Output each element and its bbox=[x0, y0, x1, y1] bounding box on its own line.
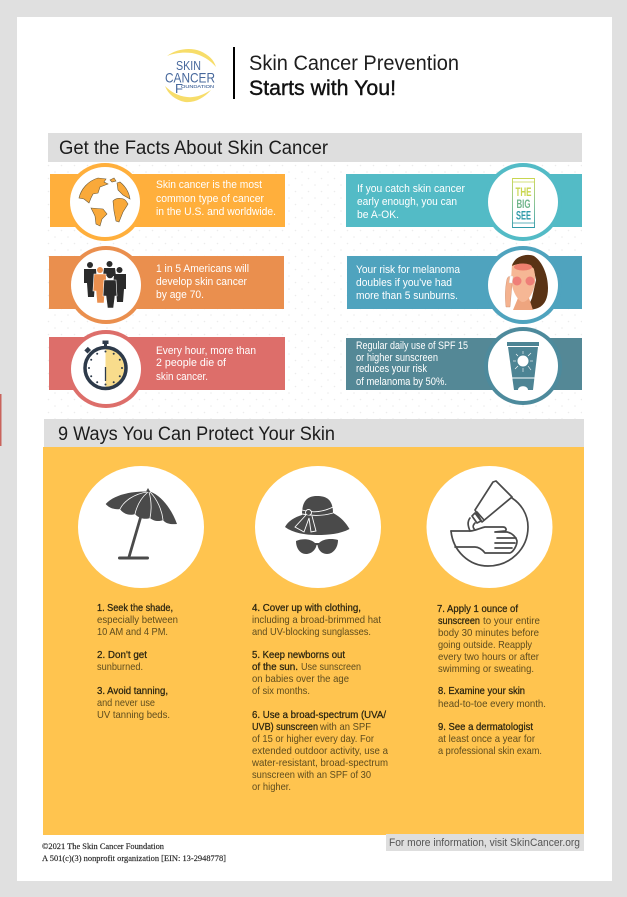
fact: sunburns bbox=[347, 246, 582, 324]
list column 3: head-to-toe every month. bbox=[438, 699, 546, 710]
fact text: doubles if you've had bbox=[356, 277, 452, 289]
header divider bar bbox=[233, 47, 235, 99]
list column 2: 6. Use a broad-spectrum (UVA/ bbox=[252, 710, 386, 721]
list column 2: extended outdoor activity, use a bbox=[252, 746, 388, 757]
title: Starts with You! bbox=[249, 76, 396, 100]
list column 2: water-resistant, broad-spectrum bbox=[251, 758, 388, 769]
list column 2: sunscreen with an SPF of 30 bbox=[252, 770, 371, 781]
icon: beach umbrella bbox=[78, 466, 204, 588]
list column 1: sunburned. bbox=[97, 662, 143, 673]
list column 2: of 15 or higher every day. For bbox=[252, 734, 375, 745]
logo: Skin Cancer Foundation: CANCER bbox=[165, 70, 215, 86]
list column 3 bbox=[437, 604, 546, 757]
fact text bbox=[156, 263, 249, 301]
list column 2: of the sun. bbox=[252, 662, 298, 673]
fact text: early enough, you can bbox=[357, 196, 457, 208]
fact: catch early bbox=[346, 163, 582, 241]
icon: sunburned face bbox=[505, 255, 548, 310]
fact text: or higher sunscreen bbox=[356, 352, 438, 364]
fact text: Skin cancer is the most bbox=[156, 179, 262, 191]
list column 2: on babies over the age bbox=[252, 674, 349, 685]
list column 3: every two hours or after bbox=[438, 652, 540, 663]
list column 1: 3. Avoid tanning, bbox=[97, 686, 168, 697]
fact text: develop skin cancer bbox=[156, 276, 247, 288]
title: Skin Cancer Prevention bbox=[249, 51, 459, 75]
fact text bbox=[156, 179, 276, 218]
list column 2: including a broad-brimmed hat bbox=[252, 615, 381, 626]
list column 3: going outside. Reapply bbox=[438, 640, 533, 651]
fact text: Regular daily use of SPF 15 bbox=[356, 340, 468, 352]
list column 1: UV tanning beds. bbox=[97, 710, 170, 721]
heading: Get the Facts bbox=[48, 133, 582, 162]
title bbox=[249, 51, 459, 100]
fact text bbox=[356, 264, 461, 302]
fact text bbox=[357, 183, 465, 221]
fact text: common type of cancer bbox=[156, 193, 264, 205]
icon: hat and sunglasses bbox=[255, 466, 381, 588]
list column 3: body 30 minutes before bbox=[438, 628, 539, 639]
list column 2: with an SPF bbox=[319, 722, 371, 733]
fact text: by age 70. bbox=[156, 289, 204, 301]
list column 1: and never use bbox=[97, 698, 155, 709]
list column 1: 2. Don't get bbox=[97, 650, 147, 661]
heading: 9 Ways bbox=[44, 419, 584, 447]
list column 3: a professional skin exam. bbox=[438, 746, 542, 757]
footer copyright: A 501(c)(3) nonprofit organization [EIN: 13-2948778] bbox=[42, 853, 226, 863]
fact: every hour bbox=[49, 330, 285, 408]
panel: protect your skin bbox=[43, 447, 584, 835]
fact text: be A-OK. bbox=[357, 209, 399, 221]
list column 2: UVB) sunscreen bbox=[252, 722, 318, 733]
fact text: Your risk for melanoma bbox=[356, 264, 461, 276]
fact text bbox=[356, 340, 468, 388]
fact text: Every hour, more than bbox=[156, 345, 256, 357]
logo: Skin Cancer Foundation: SKIN bbox=[176, 58, 201, 73]
dotted facts background bbox=[44, 162, 582, 419]
list column 3: to your entire bbox=[483, 616, 540, 627]
fact text: 1 in 5 Americans will bbox=[156, 263, 249, 275]
icon: stopwatch bbox=[84, 340, 126, 388]
fact text: 2 people die of bbox=[156, 357, 227, 369]
fact text: reduces your risk bbox=[356, 363, 427, 375]
icon: The Big See bbox=[512, 178, 534, 228]
fact: 1 in 5 Americans bbox=[49, 246, 284, 324]
list column 2: Use sunscreen bbox=[301, 662, 361, 673]
list column 2: of six months. bbox=[252, 686, 310, 697]
list column 2: 5. Keep newborns out bbox=[252, 650, 345, 661]
logo: Skin Cancer Foundation bbox=[165, 49, 216, 102]
list column 2 bbox=[251, 603, 388, 793]
fact text: more than 5 sunburns. bbox=[356, 290, 458, 302]
list column 3: 7. Apply 1 ounce of bbox=[437, 604, 518, 615]
fact: daily SPF bbox=[346, 327, 582, 405]
footer copyright bbox=[42, 841, 226, 863]
list column 2: 4. Cover up with clothing, bbox=[252, 603, 361, 614]
list column 3: 8. Examine your skin bbox=[438, 686, 525, 697]
heading: Get the Facts: Get the Facts About Skin Cancer bbox=[59, 138, 329, 159]
icon: sunscreen tube bbox=[507, 342, 539, 390]
more information callout: For more information, visit SkinCancer.org bbox=[389, 837, 580, 849]
fact text: skin cancer. bbox=[156, 371, 208, 383]
fact text: If you catch skin cancer bbox=[357, 183, 465, 195]
icon: The Big See: THE bbox=[516, 185, 532, 199]
list column 1 bbox=[97, 603, 178, 721]
icon: globe bbox=[79, 178, 130, 226]
list column 3: at least once a year for bbox=[438, 734, 536, 745]
icon: sunscreen on hand bbox=[426, 466, 552, 588]
icon: The Big See: BIG bbox=[516, 197, 530, 211]
list column 1: 10 AM and 4 PM. bbox=[97, 627, 168, 638]
fact text bbox=[156, 345, 256, 383]
icon: group of people bbox=[84, 261, 126, 308]
list column 1: especially between bbox=[97, 615, 178, 626]
fact text: of melanoma by 50%. bbox=[356, 376, 447, 388]
list column 2: and UV-blocking sunglasses. bbox=[252, 627, 371, 638]
logo: Skin Cancer Foundation: F bbox=[175, 81, 183, 96]
icon: The Big See: SEE bbox=[516, 208, 531, 222]
heading: 9 Ways: 9 Ways You Can Protect Your Skin bbox=[58, 424, 335, 445]
more information callout bbox=[386, 834, 584, 851]
list column 2: or higher. bbox=[252, 782, 291, 793]
list column 1: 1. Seek the shade, bbox=[97, 603, 173, 614]
fact: most common cancer bbox=[50, 163, 285, 241]
fact text: in the U.S. and worldwide. bbox=[156, 206, 276, 218]
list column 3: sunscreen bbox=[438, 616, 480, 627]
list column 3: 9. See a dermatologist bbox=[438, 722, 533, 733]
footer copyright: ©2021 The Skin Cancer Foundation bbox=[42, 841, 165, 851]
logo: Skin Cancer Foundation: OUNDATION bbox=[181, 84, 214, 89]
list column 3: swimming or sweating. bbox=[438, 664, 534, 675]
